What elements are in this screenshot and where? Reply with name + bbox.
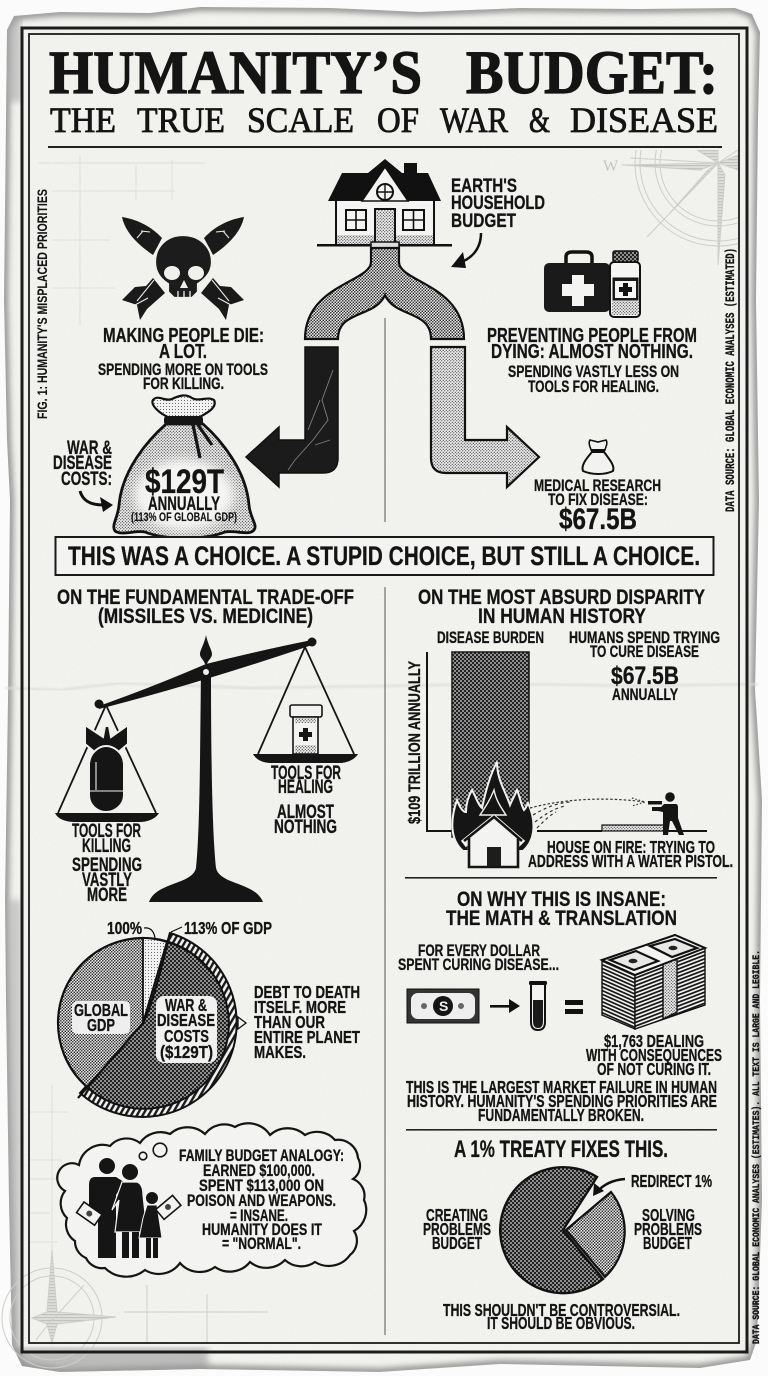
text: medical research: TO FIX DISEASE: — [548, 490, 648, 509]
heading: fundamental trade-off: (MISSILES VS. MEDICINE) — [98, 604, 313, 628]
heading: 1% treaty: A 1% TREATY FIXES THIS. — [454, 1136, 668, 1163]
label: solving problems budget — [634, 1205, 702, 1253]
icon: person with water pistol — [530, 792, 684, 835]
pie label: war and disease — [157, 995, 215, 1062]
text: dollar consequence: $1,763 DEALING — [604, 1031, 704, 1051]
pie label: global gdp: GLOBAL — [74, 1000, 128, 1020]
subtitle: OF — [377, 100, 419, 140]
text: medical research — [534, 476, 661, 536]
compass watermark top right — [603, 150, 738, 265]
icon: equals — [565, 1000, 583, 1014]
text: making people die: FOR KILLING. — [143, 374, 224, 393]
icon: money stack — [602, 935, 705, 1029]
left pan with bomb — [55, 705, 159, 822]
compass watermark bottom left — [2, 1250, 268, 1368]
label: tools for healing: ALMOST — [277, 802, 334, 823]
callout: family budget thought cloud — [57, 1123, 366, 1277]
arrow: redirect — [593, 1179, 625, 1196]
cloud text — [179, 1147, 344, 1253]
label: earth's household budget: BUDGET — [451, 211, 516, 232]
bag amount: $129T — [145, 463, 224, 501]
text: debt to death: ITSELF. MORE — [254, 997, 346, 1017]
text: debt to death: DEBT TO DEATH — [254, 982, 360, 1002]
pie label: global gdp: GDP — [87, 1015, 115, 1035]
subtitle: DISEASE — [570, 100, 718, 140]
title — [49, 40, 718, 140]
heading: fundamental trade-off — [57, 585, 354, 628]
arrow: to bag — [80, 491, 113, 512]
figure side label: FIG. 1: HUMANITY'S MISPLACED PRIORITIES — [34, 189, 50, 419]
chart labels: disparity: DISEASE BURDEN — [437, 628, 544, 647]
text: for every dollar: SPENT CURING DISEASE... — [398, 955, 559, 974]
subtitle: THE — [50, 100, 116, 140]
label: tools for killing — [72, 821, 142, 906]
label: war and disease costs — [53, 438, 112, 490]
cloud text: SPENT $113,000 ON — [199, 1177, 324, 1195]
label: solving problems budget: SOLVING — [642, 1205, 695, 1225]
chart labels: gdp pie callouts: 113% OF GDP — [184, 918, 272, 938]
subtitle: WAR — [440, 100, 508, 140]
data source footnote side label: DATA SOURCE: GLOBAL ECONOMIC ANALYSES (ESTIMATES). ALL TEXT IS LARGE AND LEGIBLE. — [751, 950, 763, 1344]
caption: house on fire — [528, 837, 733, 871]
cloud text: = "NORMAL". — [222, 1235, 301, 1253]
text: closing statement — [443, 1300, 680, 1333]
marker: pie pointer — [238, 1017, 246, 1029]
chart labels: gdp pie callouts: 100% — [107, 918, 142, 938]
cloud text: = INSANE. — [230, 1207, 288, 1225]
label: tools for killing: MORE — [87, 885, 127, 906]
text: debt to death: THAN OUR — [254, 1012, 325, 1032]
text: market failure: FUNDAMENTALLY BROKEN. — [478, 1105, 644, 1125]
chart: gdp pie — [58, 933, 237, 1117]
chart: disease burden bar — [405, 652, 707, 837]
cloud text: POISON AND WEAPONS. — [187, 1192, 336, 1210]
chart labels: disparity: $67.5B — [611, 662, 679, 690]
label: tools for killing: TOOLS FOR — [72, 821, 141, 842]
title rule — [48, 146, 722, 148]
icon: cash left — [77, 1202, 102, 1225]
icon: family silhouettes — [89, 1158, 162, 1258]
heading: why this is insane: ON WHY THIS IS INSANE: — [457, 887, 666, 911]
bag percentage: (113% OF GLOBAL GDP) — [131, 512, 237, 524]
arrow: light flow to medicine — [431, 347, 539, 487]
label: creating problems budget: PROBLEMS — [423, 1219, 491, 1239]
subtitle: SCALE — [247, 100, 354, 140]
icon: test tube — [529, 981, 547, 1030]
heading: most absurd disparity — [418, 585, 705, 628]
subtitle: TRUE — [137, 100, 225, 140]
text: dollar consequence — [586, 1031, 722, 1079]
text: preventing people from dying: TOOLS FOR HEALING. — [528, 377, 659, 396]
label: creating problems budget: BUDGET — [432, 1233, 482, 1253]
title line 1: BUDGET: — [466, 40, 718, 107]
chart: disease burden bar: $109 TRILLION ANNUALLY — [405, 661, 424, 824]
label: earth's household budget — [451, 176, 545, 232]
label: creating problems budget — [423, 1205, 491, 1253]
text: medical research: $67.5B — [559, 503, 637, 536]
pie label: war and disease: WAR & — [165, 995, 207, 1015]
text: market failure — [406, 1077, 717, 1125]
text: making people die — [98, 325, 268, 393]
icon: big money bag with costs — [114, 395, 255, 538]
label: tools for killing: SPENDING — [72, 855, 142, 876]
pie label: war and disease: DISEASE — [157, 1010, 215, 1030]
label: redirect 1%: REDIRECT 1% — [631, 1171, 712, 1191]
icon: house — [317, 159, 452, 246]
text: making people die: MAKING PEOPLE DIE: — [103, 325, 264, 347]
data source side label: DATA SOURCE: GLOBAL ECONOMIC ANALYSES (ESTIMATED) — [724, 248, 738, 512]
grid lines watermark — [30, 155, 205, 1250]
right pan with pill bottle — [253, 647, 358, 763]
arrow: to pipe — [451, 233, 481, 268]
text: dollar consequence: OF NOT CURING IT. — [597, 1059, 711, 1079]
label: solving problems budget: PROBLEMS — [634, 1219, 702, 1239]
heading: fundamental trade-off: ON THE FUNDAMENTAL TRADE-OFF — [57, 585, 354, 609]
text: preventing people from dying: PREVENTING PEOPLE FROM — [487, 325, 697, 347]
pie label: war and disease: COSTS — [164, 1026, 209, 1046]
icon: cash right — [156, 1195, 181, 1219]
text: making people die: SPENDING MORE ON TOOLS — [98, 360, 268, 379]
pie label: war and disease: ($129T) — [160, 1042, 213, 1062]
bag sublabel: ANNUALLY — [148, 494, 220, 515]
label: creating problems budget: CREATING — [426, 1205, 488, 1225]
heading: why this is insane — [446, 887, 677, 930]
label: solving problems budget: BUDGET — [643, 1233, 692, 1253]
icon: dollar bill — [407, 989, 479, 1023]
compass watermark top right: W — [603, 158, 619, 175]
chart labels: disparity: ANNUALLY — [612, 685, 678, 704]
chart: balance scale — [55, 635, 358, 902]
icon: medical kit and bottle — [544, 251, 640, 317]
chart labels: disparity — [437, 628, 720, 704]
label: tools for healing: TOOLS FOR — [271, 763, 341, 784]
icon: house on fire — [452, 762, 533, 867]
text: closing statement: IT SHOULD BE OBVIOUS. — [487, 1313, 635, 1333]
text: for every dollar: FOR EVERY DOLLAR — [418, 941, 540, 960]
center divider — [384, 318, 386, 1335]
cloud text: EARNED $100,000. — [203, 1162, 315, 1180]
cloud text: HUMANITY DOES IT — [202, 1221, 322, 1239]
text: preventing people from dying — [487, 325, 697, 396]
label: tools for healing: NOTHING — [274, 817, 337, 838]
pie label: global gdp — [72, 1000, 130, 1035]
chart labels: disparity: TO CURE DISEASE — [590, 642, 699, 661]
label: war and disease costs: COSTS: — [61, 469, 112, 490]
heading: most absurd disparity: IN HUMAN HISTORY — [478, 604, 646, 628]
label: tools for killing: KILLING — [82, 836, 131, 857]
label: tools for healing: HEALING — [278, 777, 333, 798]
icon: dollar bill: S — [439, 998, 448, 1014]
text: debt to death — [254, 982, 360, 1062]
text: making people die: A LOT. — [159, 341, 207, 363]
icon: small money bag — [582, 440, 613, 474]
text: debt to death: MAKES. — [254, 1042, 306, 1062]
subtitle: & — [529, 100, 550, 140]
text: for every dollar — [398, 941, 559, 974]
label: tools for healing — [271, 763, 341, 838]
text: preventing people from dying: DYING: ALMOST NOTHING. — [491, 341, 693, 363]
title line 1: HUMANITY’S — [49, 40, 422, 107]
subtitle — [50, 100, 718, 140]
label: earth's household budget: EARTH'S — [451, 176, 517, 197]
heading: why this is insane: THE MATH & TRANSLATION — [446, 906, 677, 930]
chart: treaty pie — [500, 1167, 625, 1293]
chart labels: gdp pie callouts — [107, 918, 272, 938]
title line 1 — [49, 40, 718, 107]
label: war and disease costs: DISEASE — [53, 453, 112, 474]
text: medical research: MEDICAL RESEARCH — [534, 476, 661, 495]
text: debt to death: ENTIRE PLANET — [254, 1027, 360, 1047]
pipe: split — [305, 242, 464, 339]
arrow: dollar to tube — [490, 999, 520, 1013]
cloud text: FAMILY BUDGET ANALOGY: — [179, 1147, 344, 1165]
text: preventing people from dying: SPENDING VASTLY LESS ON — [508, 362, 679, 381]
label: tools for killing: VASTLY — [82, 870, 132, 891]
label: war and disease costs: WAR & — [67, 438, 112, 459]
label: earth's household budget: HOUSEHOLD — [451, 193, 545, 214]
icon: skull and crossed rockets — [122, 217, 244, 320]
arrow: black flow to war — [246, 347, 338, 487]
